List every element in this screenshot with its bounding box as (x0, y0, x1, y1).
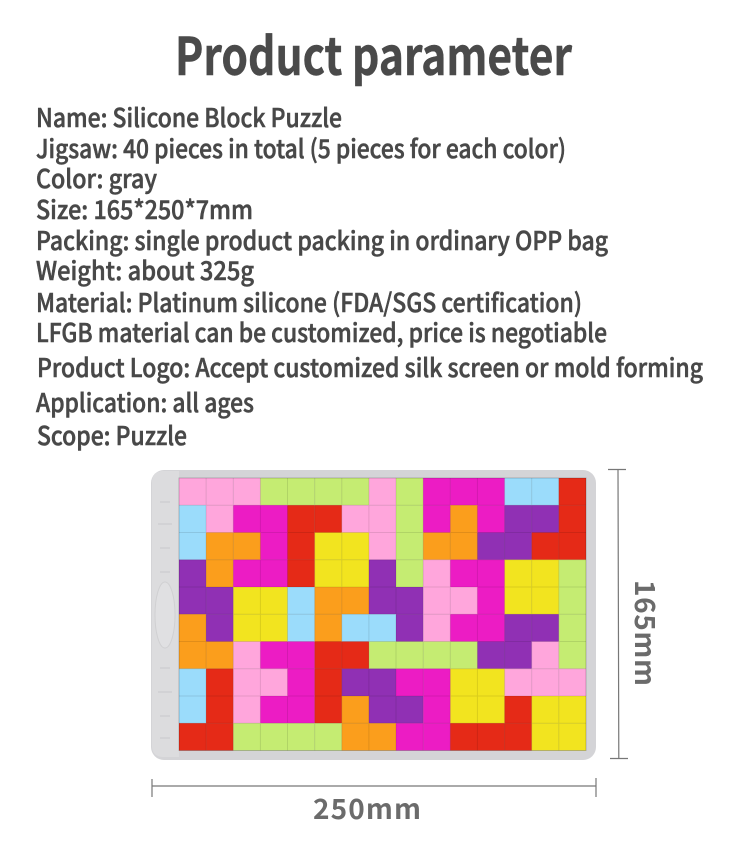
dimension: height 165mm (608, 470, 666, 758)
dimension: width 250mm: 250mm (313, 788, 421, 828)
parameter: weight: Weight: about 325g (36, 251, 254, 288)
tray embossed oval (155, 582, 175, 648)
parameter: packing: Packing: single product packing in ordinary OPP bag (36, 221, 608, 258)
parameter: color: Color: gray (36, 159, 157, 196)
parameter: jigsaw: Jigsaw: 40 pieces in total (5 pieces for each color) (36, 129, 566, 166)
puzzle cells (179, 478, 586, 750)
parameter: material: Material: Platinum silicone (FDA/SGS certification) (36, 283, 582, 320)
dimension: height 165mm: 165mm (626, 580, 666, 686)
board tray (151, 470, 596, 760)
title: Product parameter (175, 15, 572, 90)
dimension: width 250mm (152, 778, 596, 828)
tray left strip (152, 471, 179, 757)
parameter: application: Application: all ages (36, 383, 254, 420)
puzzle board (151, 470, 596, 760)
parameter: scope: Scope: Puzzle (37, 416, 187, 453)
parameter: name: Name: Silicone Block Puzzle (36, 98, 342, 135)
parameter list (36, 98, 703, 453)
parameter: LFGB note: LFGB material can be customized, price is negotiable (36, 313, 607, 350)
parameter: size: Size: 165*250*7mm (36, 190, 253, 227)
tray embossed marks (158, 502, 172, 738)
